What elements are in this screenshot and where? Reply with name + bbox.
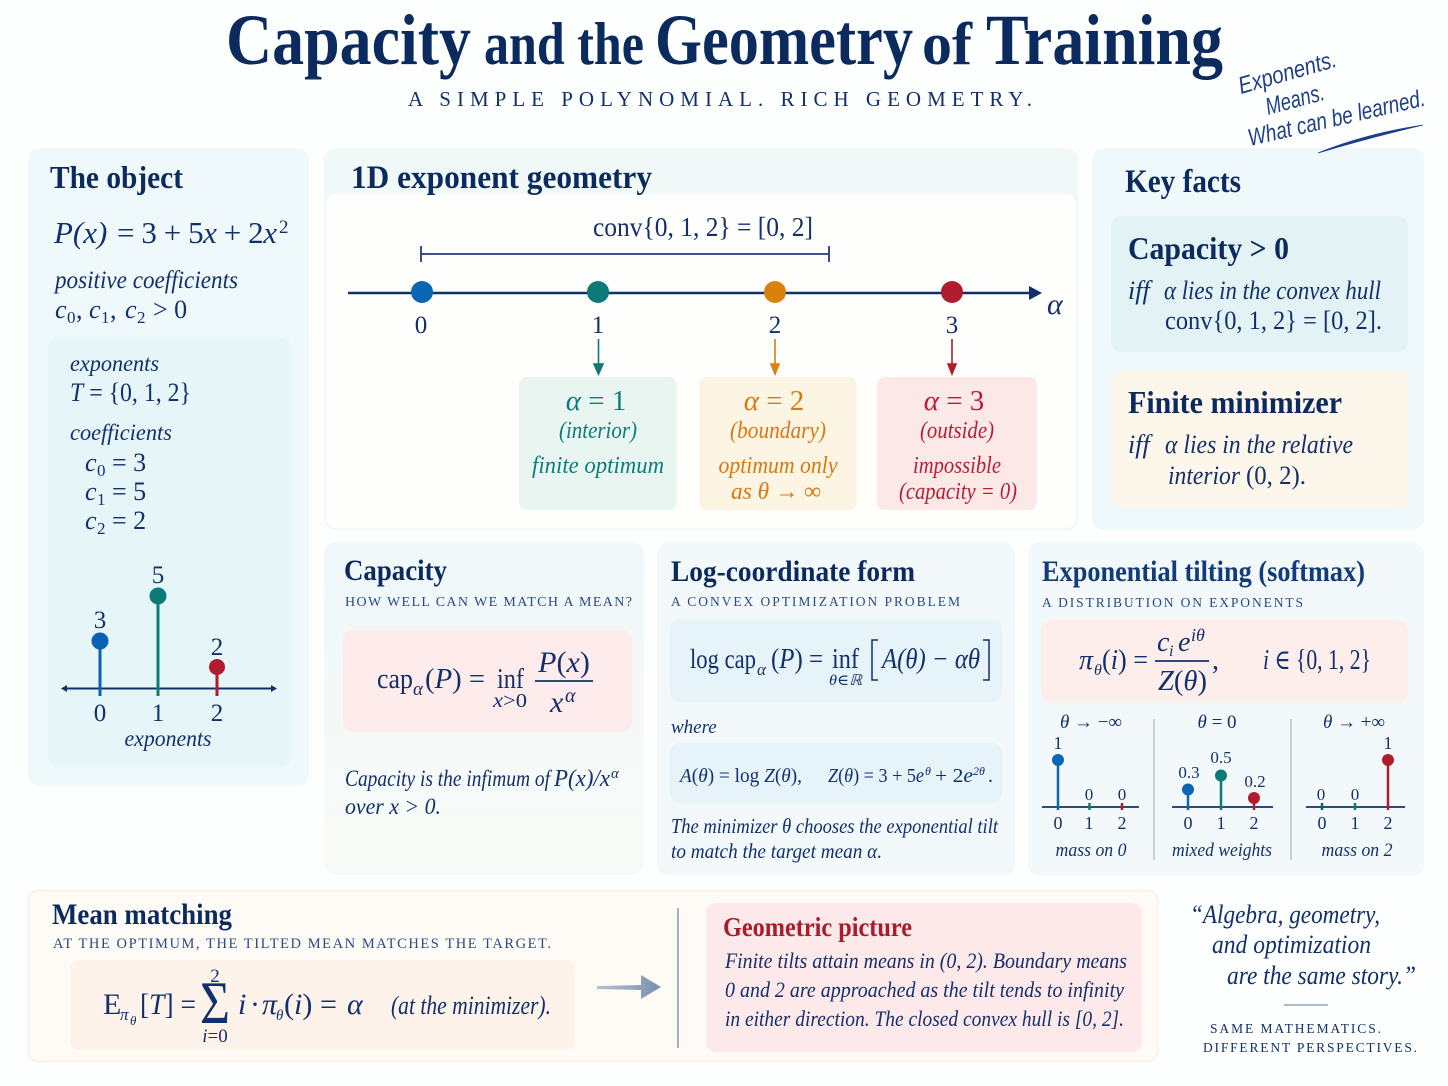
mini chart: theta zero: 0.2 [1244, 772, 1266, 791]
convex hull bracket: conv{0, 1, 2} = [0, 2] [593, 212, 813, 242]
formula: A and Z definitions: . [988, 765, 993, 787]
mini chart: theta zero: 2 [1250, 813, 1258, 833]
formula: A and Z definitions: θ [925, 764, 931, 778]
mini chart: theta zero [1172, 712, 1273, 861]
formula: A and Z definitions: A(θ) = log Z(θ), [678, 765, 802, 787]
convex hull bracket [421, 212, 829, 262]
caption: minimizer [671, 814, 999, 863]
formula: softmax: i [1169, 643, 1173, 660]
panel: 1D exponent geometry [324, 148, 1078, 530]
formula: log capacity: A(θ) − αθ [880, 644, 980, 675]
card: alpha 2 boundary [699, 377, 857, 510]
stem chart: coefficients by exponent: 5 [152, 562, 164, 589]
panel: exponents and coefficients: exponents [70, 351, 159, 376]
heading: log-coordinate form: Log-coordinate form [671, 555, 915, 588]
caption: minimizer: The minimizer θ chooses the exponential tilt [671, 814, 999, 838]
formula: tilted mean: i [238, 988, 246, 1021]
fact: finite minimizer: (0, 2). [1246, 461, 1306, 490]
number line alpha axis [348, 281, 1064, 339]
formula: log capacity: inf [832, 644, 860, 675]
formula: softmax: (i) = [1102, 645, 1148, 676]
heading: key facts: Key facts [1125, 164, 1241, 200]
mini chart: theta to plus infinity: 1 [1350, 813, 1360, 833]
fact: finite minimizer: interior [1168, 461, 1241, 490]
label: where: where [671, 717, 717, 738]
formula: tilted mean: · [250, 988, 260, 1021]
mini chart: theta to plus infinity [1306, 712, 1405, 861]
positive coefficients note: c [125, 295, 137, 324]
callout: geometric picture: 0 and 2 are approached as the tilt tends to infinity [725, 977, 1124, 1002]
subheading: exponential tilting: A DISTRIBUTION ON EXPONENTS [1042, 595, 1304, 610]
panel: exponents and coefficients: c [85, 477, 97, 506]
positive coefficients note: > 0 [153, 295, 187, 324]
formula: softmax: e [1178, 627, 1190, 658]
mini chart: theta to minus infinity: mass on 0 [1056, 840, 1127, 861]
formula: softmax: Z(θ) [1158, 666, 1207, 697]
mini chart: theta zero: 0.5 [1210, 748, 1232, 767]
card: alpha 3 outside: α = 3 [924, 385, 984, 417]
heading: mean matching: Mean matching [52, 898, 232, 931]
title: and the [484, 11, 644, 77]
mini chart: theta to minus infinity: θ → −∞ [1060, 712, 1122, 733]
mini chart: theta to plus infinity: 0 [1317, 785, 1325, 804]
subtitle: A SIMPLE POLYNOMIAL. RICH GEOMETRY. [408, 87, 1032, 111]
handwritten note: Means. [1263, 79, 1328, 121]
card: alpha 2 boundary: α = 2 [744, 385, 804, 417]
mini chart: theta to minus infinity [1042, 712, 1139, 861]
positive coefficients note: 1 [101, 308, 110, 327]
positive coefficients note: 2 [137, 308, 146, 327]
formula: capacity definition [343, 630, 632, 732]
formula: tilted mean: i=0 [202, 1026, 228, 1047]
callout: geometric picture [706, 903, 1142, 1052]
formula: softmax: i ∈ {0, 1, 2} [1263, 645, 1371, 676]
stem chart: coefficients by exponent: 2 [211, 634, 223, 661]
card: alpha 1 interior [519, 377, 677, 510]
formula: log capacity [670, 619, 1002, 702]
polynomial formula: 2 [279, 217, 288, 238]
mini chart: theta to minus infinity: 0 [1085, 785, 1093, 804]
mini chart: theta to plus infinity: 2 [1384, 813, 1392, 833]
formula: capacity definition: (P) = [425, 663, 485, 695]
caption: capacity: over x > 0. [345, 794, 441, 819]
panel: exponents and coefficients: = 2 [112, 506, 146, 535]
fact: finite minimizer: iff [1128, 430, 1153, 459]
card: alpha 3 outside [877, 377, 1037, 510]
formula: capacity definition: inf [497, 664, 525, 695]
callout: geometric picture: Finite tilts attain means in (0, 2). Boundary means [724, 948, 1127, 973]
positive coefficients note: c [55, 295, 67, 324]
panel: exponents and coefficients: 2 [97, 519, 106, 538]
fact: capacity positive: Capacity > 0 [1128, 230, 1289, 266]
formula: tilted mean: θ [130, 1013, 137, 1028]
quote: are the same story.” [1227, 961, 1416, 990]
arrow: alpha 2 [771, 339, 779, 374]
caption: capacity: Capacity is the infimum of [345, 766, 553, 791]
stem chart: coefficients by exponent: 1 [152, 700, 164, 727]
number line alpha axis: α [1047, 288, 1064, 321]
positive coefficients note: , [76, 295, 82, 324]
stem chart: coefficients by exponent: 2 [211, 700, 223, 727]
mini chart: theta zero: 0.3 [1178, 763, 1200, 782]
formula: A and Z definitions: Z(θ) = 3 + 5e [828, 765, 924, 787]
polynomial formula [53, 215, 288, 250]
fact: capacity positive [1111, 216, 1408, 352]
formula: capacity definition: x [549, 686, 564, 719]
number line alpha axis: 0 [415, 312, 427, 339]
formula: tilted mean [70, 960, 575, 1050]
fact: finite minimizer [1111, 370, 1408, 508]
caption: capacity [345, 766, 620, 819]
formula: log capacity: log cap [690, 644, 756, 674]
panel: key facts [1092, 148, 1424, 530]
formula: capacity definition: α [565, 685, 576, 707]
caption: capacity: α [611, 766, 620, 782]
title: of [922, 11, 973, 77]
formula: tilted mean: Σ [200, 970, 230, 1036]
formula: tilted mean: E [103, 988, 121, 1021]
fact: finite minimizer: Finite minimizer [1128, 384, 1342, 420]
mini chart: theta to minus infinity: 1 [1084, 813, 1094, 833]
card: alpha 1 interior: α = 1 [566, 385, 626, 417]
formula: capacity definition: α [413, 679, 424, 700]
arrow: to geometric picture [597, 975, 661, 999]
panel: exponents and coefficients [48, 338, 291, 766]
stem chart: coefficients by exponent: 0 [94, 700, 106, 727]
mini chart: theta to minus infinity: 0 [1054, 813, 1062, 833]
arrow: alpha 1 [594, 339, 603, 374]
formula: capacity definition: P(x) [537, 646, 590, 679]
card: alpha 1 interior: (interior) [559, 418, 637, 444]
subheading: mean matching: AT THE OPTIMUM, THE TILTED MEAN MATCHES THE TARGET. [53, 936, 552, 952]
fact: capacity positive: α lies in the convex hull [1164, 276, 1381, 305]
card: alpha 2 boundary: (boundary) [730, 418, 826, 444]
number line alpha axis: 3 [946, 312, 958, 339]
quote: and optimization [1212, 930, 1371, 959]
panel: the object [28, 148, 309, 786]
formula: A and Z definitions [670, 743, 1002, 803]
formula: softmax: θ [1094, 662, 1102, 679]
handwritten note: Exponents. [1235, 46, 1340, 100]
number line alpha axis: 2 [769, 312, 781, 339]
title [226, 0, 1223, 80]
panel: exponential tilting [1028, 542, 1424, 876]
panel: exponents and coefficients: T = {0, 1, 2} [70, 378, 191, 407]
formula: softmax: , [1212, 645, 1219, 676]
panel: exponents and coefficients: c [85, 448, 97, 477]
caption: minimizer: to match the target mean α. [671, 839, 882, 863]
heading: 1D exponent geometry: 1D exponent geometry [351, 160, 652, 196]
heading: the object: The object [50, 159, 183, 195]
heading: capacity: Capacity [344, 554, 447, 587]
fact: capacity positive: iff [1128, 276, 1153, 305]
formula: tilted mean: π [262, 988, 278, 1021]
handwritten note [1235, 46, 1428, 153]
fact: finite minimizer: α lies in the relative [1165, 430, 1353, 459]
mini chart: theta zero: θ = 0 [1197, 712, 1237, 733]
mini chart: theta to plus infinity: θ → +∞ [1323, 712, 1385, 733]
formula: capacity definition: x>0 [492, 690, 527, 712]
positive coefficients note: 0 [67, 308, 76, 327]
heading: exponential tilting: Exponential tilting (softmax) [1042, 555, 1365, 588]
panel: capacity [324, 542, 644, 875]
formula: A and Z definitions: + 2e [935, 765, 973, 787]
mini chart: theta zero: 1 [1216, 813, 1226, 833]
number line alpha axis: 1 [592, 312, 604, 339]
title: Training [986, 0, 1223, 80]
formula: tilted mean: (at the minimizer). [391, 991, 551, 1020]
stem chart: coefficients by exponent: 3 [94, 607, 106, 634]
card: alpha 3 outside: (outside) [920, 418, 994, 444]
mini chart: theta zero: 0 [1184, 813, 1192, 833]
mini chart: theta zero: mixed weights [1172, 840, 1272, 861]
formula: tilted mean: 2 [210, 966, 220, 987]
panel: exponents and coefficients: 1 [97, 490, 106, 509]
positive coefficients note: positive coefficients [53, 267, 238, 294]
mini chart: theta to minus infinity: 1 [1054, 733, 1062, 753]
quote: “Algebra, geometry, [1190, 900, 1380, 929]
stem chart: coefficients by exponent [61, 562, 277, 751]
subheading: log-coordinate form: A CONVEX OPTIMIZATION PROBLEM [671, 594, 961, 609]
stem chart: coefficients by exponent: exponents [124, 726, 212, 751]
subheading: capacity: HOW WELL CAN WE MATCH A MEAN? [345, 595, 633, 610]
callout: geometric picture: in either direction. The closed convex hull is [0, 2]. [725, 1006, 1124, 1031]
quote: SAME MATHEMATICS. [1210, 1021, 1381, 1036]
formula: tilted mean: (i) = [284, 988, 337, 1021]
card: alpha 2 boundary: as θ → ∞ [731, 479, 821, 505]
formula: tilted mean: π [120, 1005, 129, 1024]
formula: log capacity: (P) = [771, 644, 823, 675]
mini chart: theta to plus infinity: 1 [1384, 733, 1392, 753]
panel: exponents and coefficients: = 3 [112, 448, 146, 477]
formula: A and Z definitions: 2θ [973, 764, 985, 778]
panel: exponents and coefficients: 0 [97, 461, 106, 480]
formula: softmax [1041, 620, 1408, 702]
positive coefficients note: , [110, 295, 116, 324]
mini chart: theta to plus infinity: 0 [1351, 785, 1359, 804]
formula: softmax: iθ [1191, 625, 1205, 645]
fact: capacity positive: conv{0, 1, 2} = [0, 2]. [1165, 306, 1382, 335]
formula: tilted mean: θ [276, 1008, 284, 1024]
formula: tilted mean: α [347, 988, 364, 1021]
mini chart: theta to minus infinity: 2 [1118, 813, 1126, 833]
formula: softmax: π [1079, 645, 1094, 676]
mini chart: theta to plus infinity: 0 [1318, 813, 1326, 833]
card: alpha 1 interior: finite optimum [532, 453, 664, 479]
positive coefficients note: c [89, 295, 101, 324]
title: Geometry [655, 0, 913, 80]
caption: capacity: P(x)/x [553, 766, 610, 792]
panel: exponents and coefficients: coefficients [70, 420, 172, 445]
formula: log capacity: α [757, 660, 767, 679]
card: alpha 3 outside: impossible [913, 453, 1001, 479]
panel: log-coordinate form [657, 542, 1015, 875]
polynomial formula: = 3 + 5x + 2x [117, 215, 277, 250]
mini chart: theta to minus infinity: 0 [1118, 785, 1126, 804]
mini chart: theta to plus infinity: mass on 2 [1322, 840, 1393, 861]
card: alpha 3 outside: (capacity = 0) [899, 479, 1017, 505]
card: alpha 2 boundary: optimum only [718, 453, 838, 479]
panel: mean matching [28, 890, 1158, 1062]
callout: geometric picture: Geometric picture [723, 912, 912, 942]
positive coefficients note [53, 267, 238, 327]
quote: DIFFERENT PERSPECTIVES. [1203, 1040, 1417, 1055]
panel: exponents and coefficients: c [85, 506, 97, 535]
panel: exponents and coefficients: = 5 [112, 477, 146, 506]
title: Capacity [226, 0, 471, 80]
formula: softmax: c [1157, 627, 1170, 658]
arrow: alpha 3 [948, 339, 956, 374]
formula: log capacity: θ∈ℝ [829, 673, 863, 689]
quote [1190, 900, 1417, 1055]
formula: tilted mean: [T] = [140, 988, 196, 1021]
formula: capacity definition: cap [377, 664, 413, 695]
polynomial formula: P(x) [53, 215, 107, 250]
